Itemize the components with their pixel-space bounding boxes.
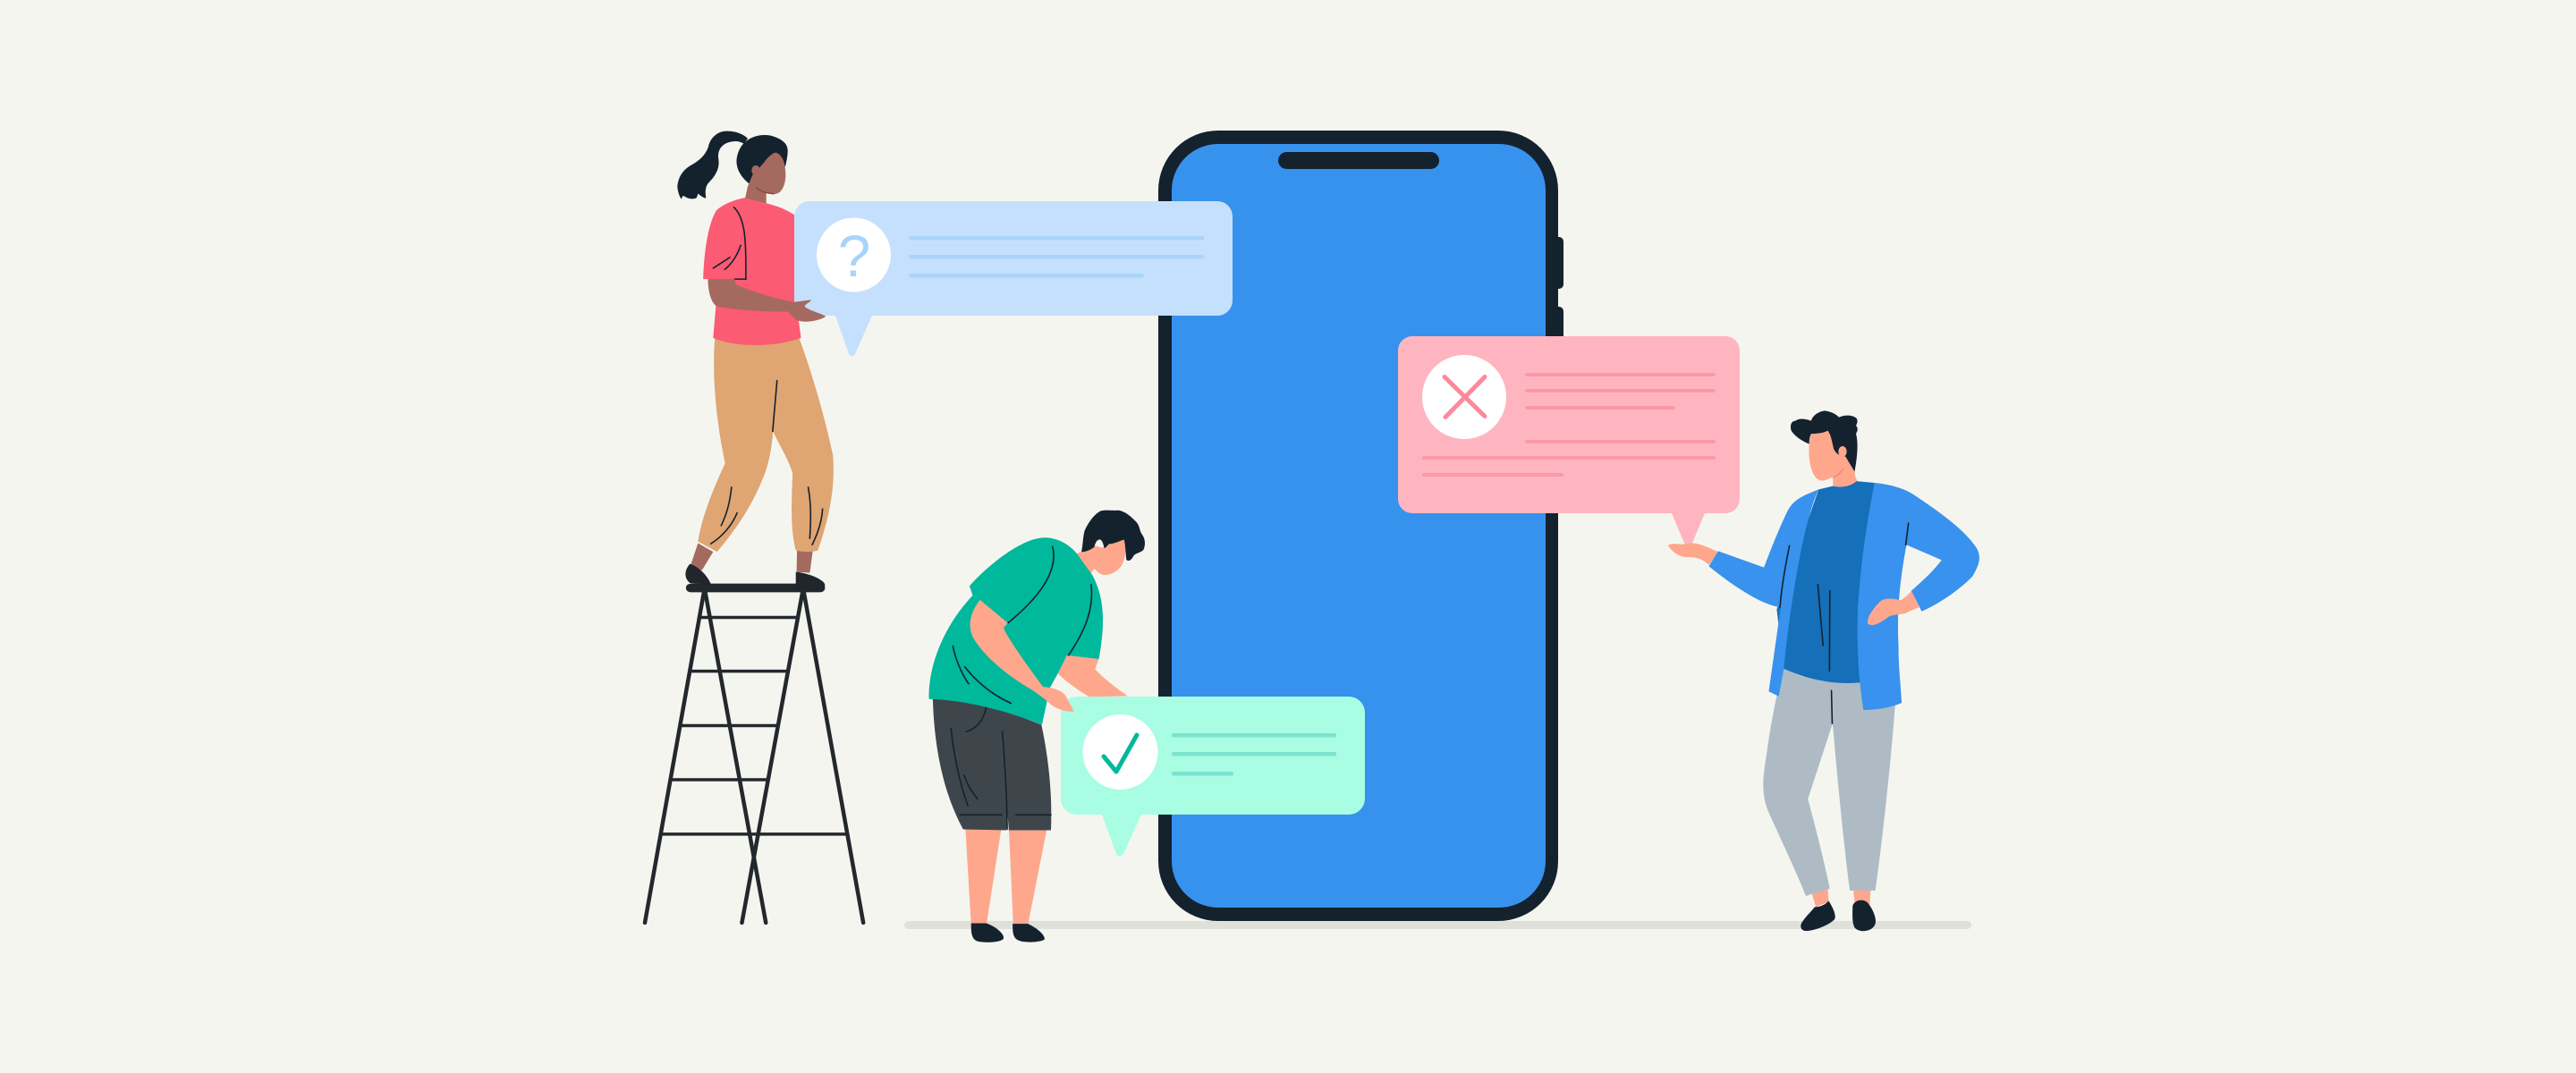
shirt shape <box>929 537 1103 724</box>
blue man face and neck <box>1809 431 1858 488</box>
ladder rungs <box>662 617 846 834</box>
green man shirt <box>929 537 1103 724</box>
woman face and neck <box>745 153 785 204</box>
woman ear <box>751 165 760 175</box>
woman head hair <box>737 135 788 188</box>
blue man jaw line <box>1833 469 1843 477</box>
cardigan left panel and sleeve <box>1709 489 1818 697</box>
ladder legs <box>645 592 863 923</box>
green man legs <box>965 828 1047 925</box>
phone body <box>1158 131 1558 921</box>
green man near arm <box>970 600 1074 712</box>
blue man clothing creases <box>1780 523 1909 723</box>
placeholder text lines <box>1172 733 1336 776</box>
green man shorts <box>933 698 1051 830</box>
blue man trousers <box>1763 669 1895 896</box>
woman on ladder <box>685 198 834 592</box>
phone notch <box>1278 152 1439 169</box>
blue man shoes <box>1801 900 1876 931</box>
green man head <box>1076 511 1145 575</box>
question icon circle <box>817 218 891 291</box>
blue man hair <box>1791 410 1858 472</box>
shorts creases <box>951 707 1051 829</box>
man in blue cardigan <box>1668 481 1979 931</box>
green shirt creases <box>953 546 1091 704</box>
phone screen <box>1172 144 1546 908</box>
bubble body and tail <box>1061 697 1365 857</box>
woman trousers <box>698 331 834 552</box>
question mark: ? <box>838 223 870 289</box>
blue man hands <box>1668 543 1919 625</box>
woman shirt <box>703 198 801 345</box>
check speech bubble <box>1061 697 1365 857</box>
woman clothing creases <box>711 207 823 545</box>
woman ponytail <box>677 131 748 199</box>
blue man head <box>1791 410 1858 488</box>
man in green shirt, lower body <box>933 655 1128 942</box>
smartphone <box>1158 131 1563 921</box>
bubble body and tail <box>794 201 1233 356</box>
blue man t-shirt <box>1776 481 1875 683</box>
ground shadow <box>904 921 1971 929</box>
woman jaw line <box>757 188 774 194</box>
woman head <box>677 131 788 204</box>
green man shoes <box>971 923 1045 942</box>
cross icon circle <box>1422 355 1506 439</box>
check mark <box>1104 735 1137 772</box>
bubble body and tail <box>1398 336 1740 547</box>
cross mark <box>1445 377 1485 417</box>
woman shoes <box>685 564 825 592</box>
check icon circle <box>1082 714 1157 790</box>
placeholder text lines <box>909 236 1204 277</box>
ladder platform <box>686 584 825 592</box>
cross speech bubble <box>1398 336 1740 547</box>
green man far arm <box>1058 655 1128 697</box>
question speech bubble <box>794 201 1233 356</box>
woman ankles <box>690 543 813 573</box>
blue man ear <box>1838 446 1847 457</box>
phone side buttons <box>1553 237 1563 402</box>
green man hair <box>1081 511 1145 561</box>
woman arm holding bubble <box>708 279 826 322</box>
ladder <box>645 584 863 923</box>
placeholder text lines <box>1422 373 1716 477</box>
cardigan right panel and sleeve <box>1858 483 1979 710</box>
blue man ankles <box>1812 889 1870 907</box>
green man face and neck <box>1076 538 1125 575</box>
